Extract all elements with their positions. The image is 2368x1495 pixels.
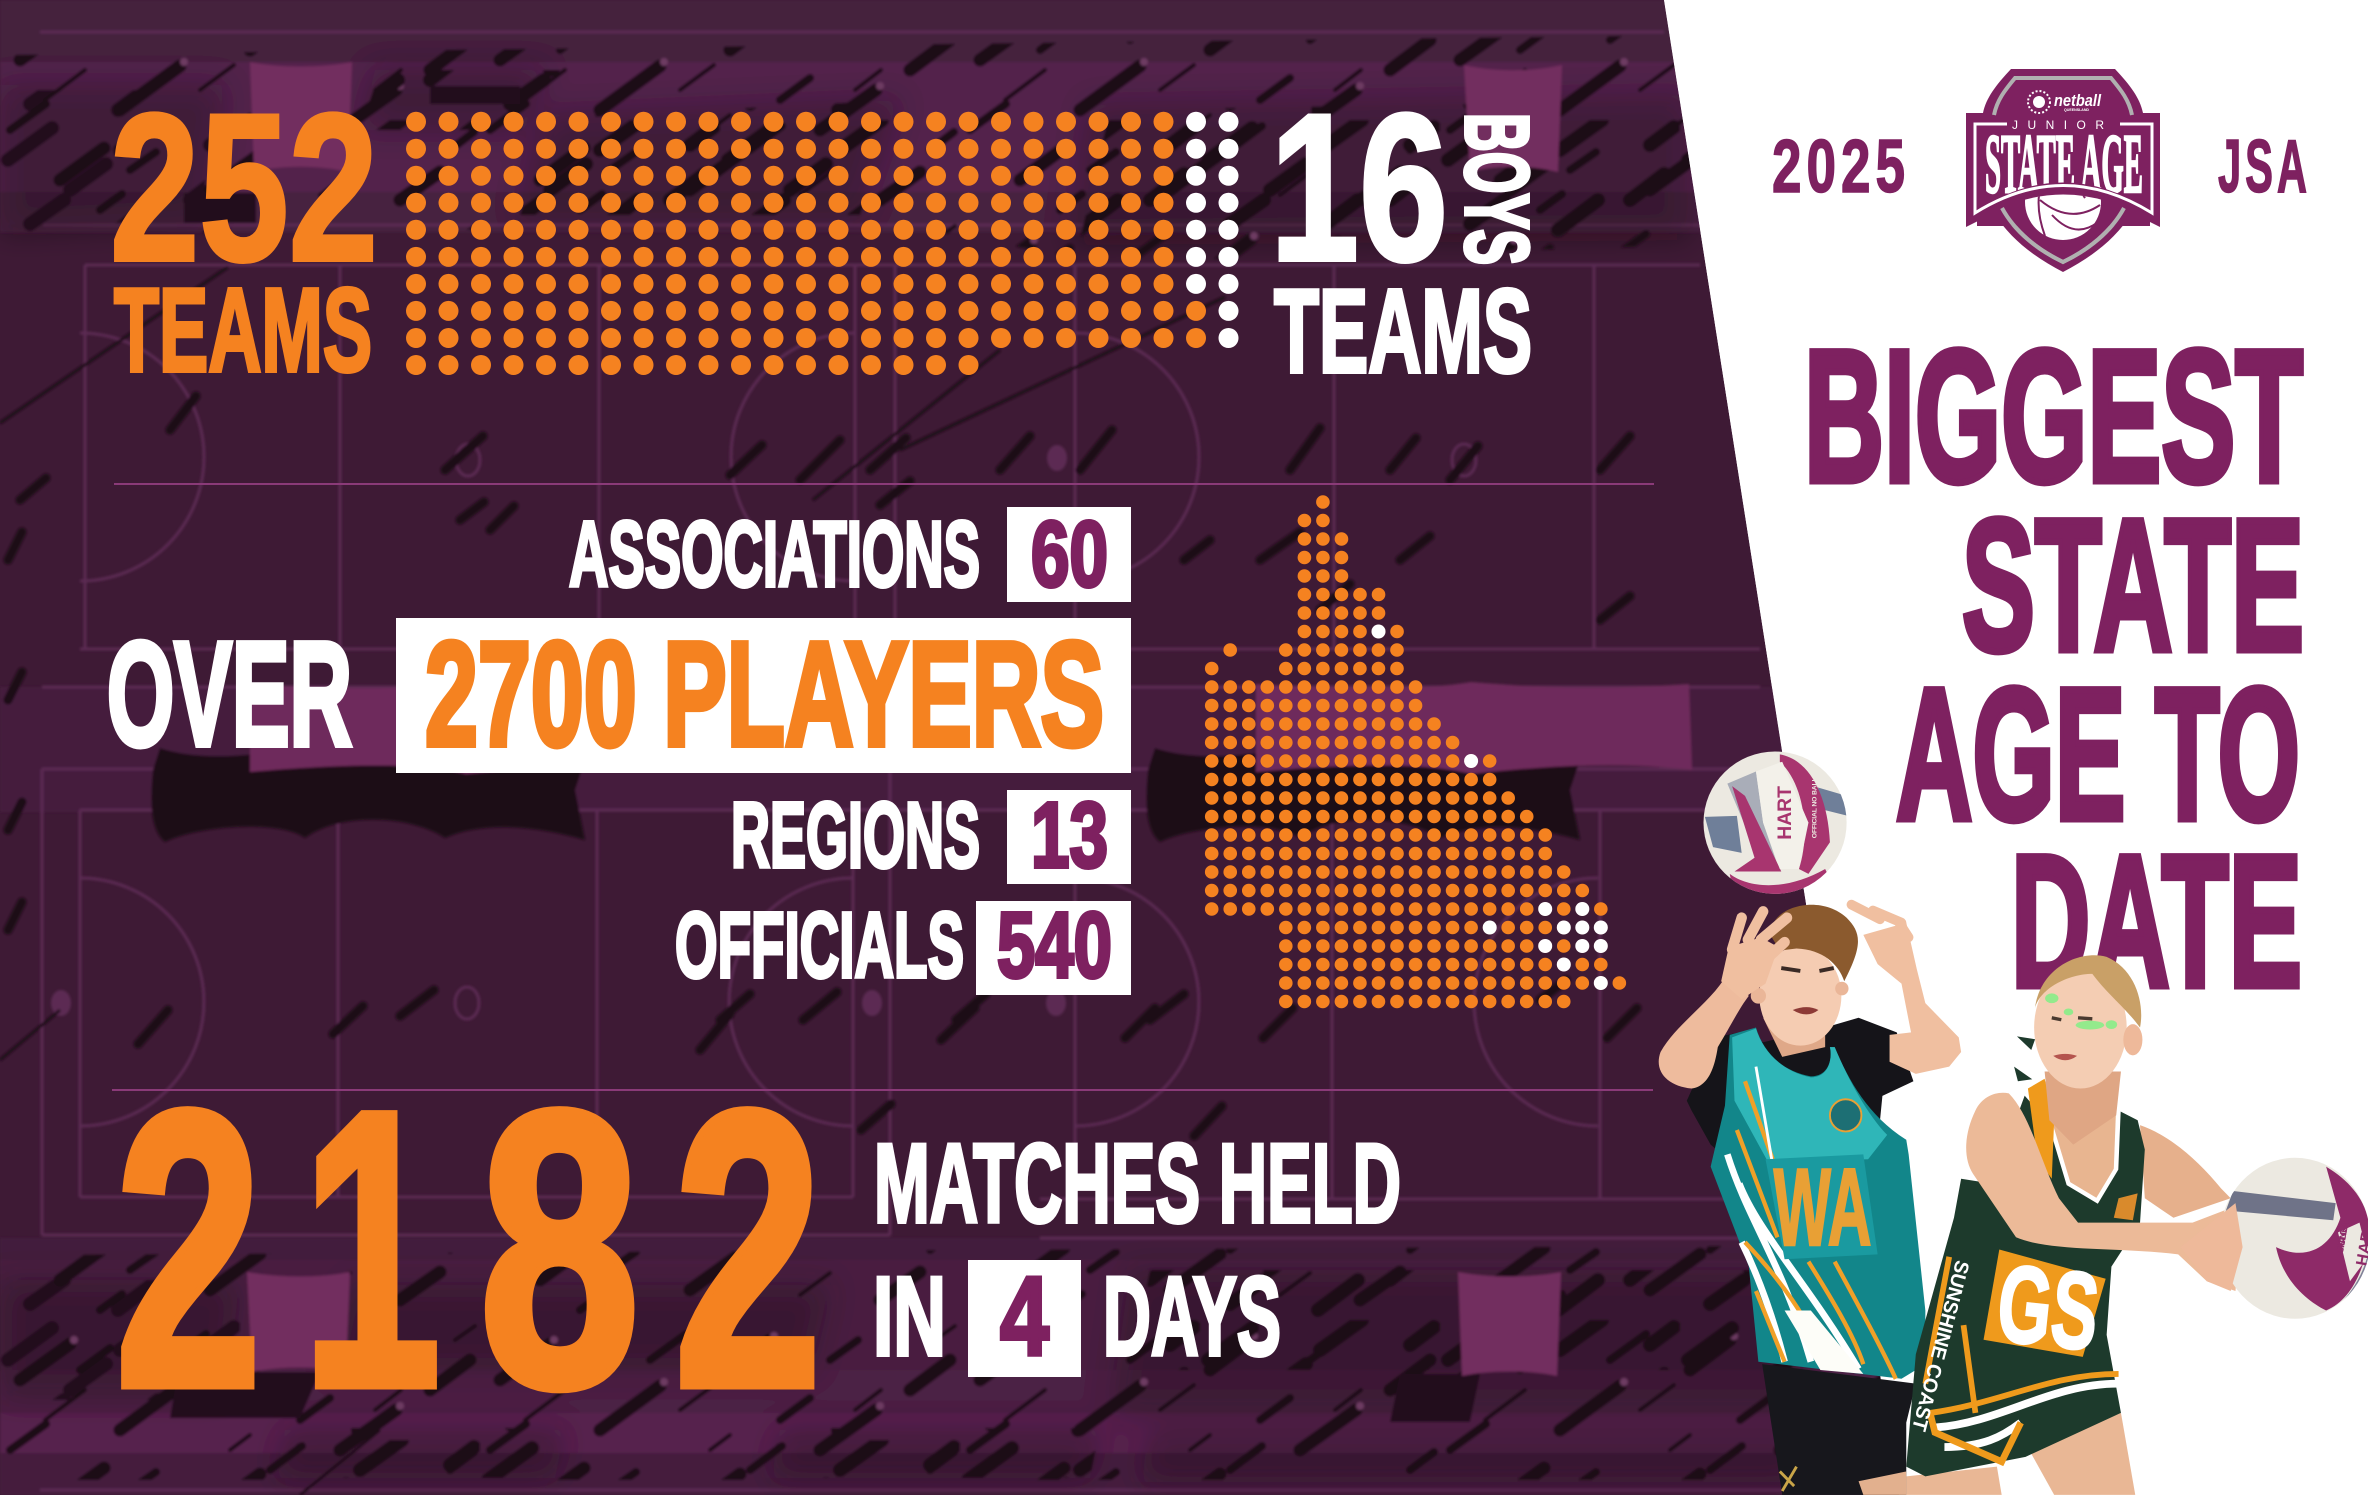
2700 players box: 2700 PLAYERS (425, 612, 1104, 777)
dark shadows under the middle banners (151, 745, 590, 842)
associations count box: 60 (1031, 502, 1108, 606)
number 2182: 2 (115, 1030, 262, 1469)
regions label: REGIONS (731, 783, 980, 887)
dark crowd masses (0, 70, 1800, 1482)
boy player in teal bib: WA (1774, 1147, 1871, 1269)
label teams white: TEAMS (1274, 265, 1532, 398)
associations label: ASSOCIATIONS (569, 502, 980, 606)
girl player in green dress (1906, 955, 2240, 1495)
boy left hand (1721, 911, 1787, 999)
officials label: OFFICIALS (675, 893, 964, 997)
days label: DAYS (1103, 1254, 1281, 1379)
netball above the boy (1703, 751, 1848, 898)
four box (968, 1254, 1081, 1379)
netball held by the girl (2206, 1158, 2368, 1319)
dot grid of 252 teams, 16 white for boys (416, 122, 1229, 365)
label boys rotated: BOYS (1446, 113, 1546, 265)
boy right hand and arm (1851, 905, 1961, 1074)
in label: IN (873, 1254, 946, 1379)
middle pink banners (248, 686, 495, 776)
top and bottom pink banners (250, 62, 352, 172)
divider lines (112, 484, 1654, 1090)
label teams: TEAMS (114, 264, 372, 397)
logo: Netball Queensland Junior State Age shield: QUEENSLAND (2064, 107, 2089, 112)
netball held by the girl: OFFICIAL NO BALL (2335, 1217, 2352, 1255)
number 16: 16 (1270, 70, 1448, 305)
players photo cut-outs (1659, 751, 2368, 1495)
four box: 4 (1000, 1254, 1049, 1379)
crowd streaks (0, 35, 1700, 262)
officials count box: 540 (997, 893, 1112, 997)
logo: Netball Queensland Junior State Age shield (1966, 69, 2160, 272)
white diagonal panel (1664, 0, 2368, 1495)
matches held label: MATCHES HELD (874, 1121, 1401, 1246)
map of Queensland made of dots (1212, 502, 1620, 1002)
year label: 2025 (1772, 124, 1910, 208)
2700 players box (396, 612, 1131, 777)
netball above the boy: HART (1775, 786, 1796, 840)
number 2182: 2 (674, 1030, 822, 1469)
over label: OVER (107, 612, 352, 777)
number 252: 252 (110, 70, 378, 305)
regions count box: 13 (1031, 783, 1108, 887)
girl player in green dress: SUNSHINE COAST (1907, 1258, 1973, 1434)
netball above the boy: OFFICIAL NO BALL (1812, 777, 1819, 838)
section: players, associations, regions, officials (107, 502, 1131, 997)
logo: Netball Queensland Junior State Age shield: JUNIOR (2012, 118, 2116, 132)
girl player in green dress: GS (1992, 1242, 2104, 1375)
logo: Netball Queensland Junior State Age shield: netball (2054, 91, 2102, 110)
number 2182 (115, 1030, 822, 1469)
number 2182: 8 (479, 1030, 640, 1469)
section: 252 teams stat (110, 70, 1546, 398)
number 2182: 1 (302, 1030, 441, 1469)
headline: biggest state age to date (1804, 311, 2304, 1026)
boy player in teal bib (1659, 905, 1961, 1495)
section: matches stat (115, 1030, 1401, 1469)
